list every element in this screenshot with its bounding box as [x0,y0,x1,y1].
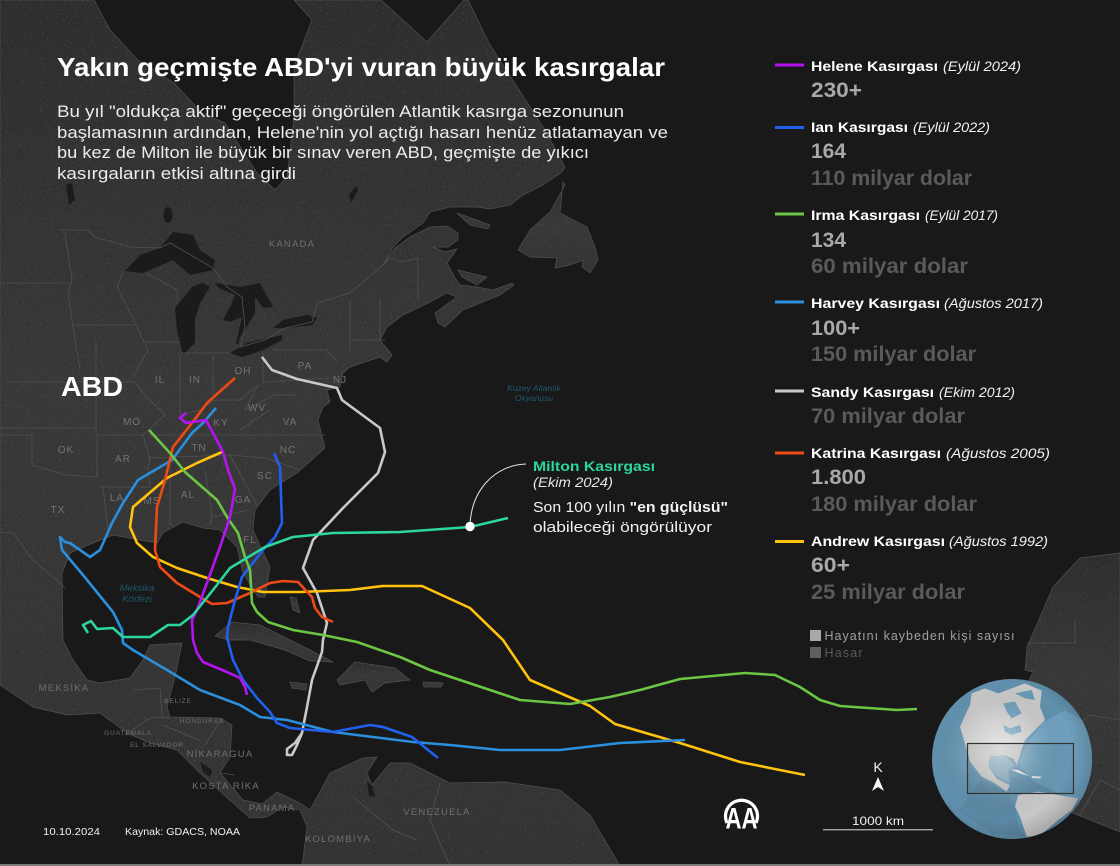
legend item: Katrina: Katrina Kasırgası [811,445,941,461]
legend item: Katrina: 180 milyar dolar [811,493,977,516]
hurricane track: Helene [180,413,247,695]
map labels: AL [181,490,195,501]
legend item: Andrew: Andrew Kasırgası [811,533,945,549]
north arrow: K [873,759,883,775]
legend item: Irma: 60 milyar dolar [811,255,968,278]
map labels: MS [144,496,160,507]
scale bar [823,814,933,830]
map labels: GA [235,495,251,506]
map labels: GUATEMALA [104,730,152,737]
label: North Atlantic Ocean: Kuzey Atlantik [507,383,562,393]
hurricane track: Andrew [130,452,805,775]
map labels: AR [115,454,131,465]
hurricane track: Harvey [60,408,685,750]
map labels: KY [213,418,229,429]
map labels: MEKSİKA [39,683,89,694]
legend: hurricanes [775,58,1050,604]
legend item: Irma: (Eylül 2017) [925,208,998,223]
map labels: EL SALVADOR [130,742,184,749]
map labels: IN [189,375,201,386]
label: North Atlantic Ocean: Okyanusu [515,393,553,403]
legend key: deaths and damage: Hasar [824,646,862,660]
map labels: KOSTA RİKA [192,781,260,792]
label: ABD: ABD [61,371,123,402]
label: Gulf of Mexico: Meksika [120,583,154,594]
hurricane track: Milton [83,518,508,637]
map labels: MO [123,417,141,428]
callout: Milton text: olabileceği öngörülüyor [533,520,712,536]
logo: Anadolu Agency: AA [726,802,758,836]
callout: Milton text: (Ekim 2024) [533,475,613,490]
legend item: Irma: Irma Kasırgası [811,207,920,223]
legend item: Sandy: (Ekim 2012) [939,385,1015,400]
legend item: Andrew: 60+ [811,554,850,577]
title: Yakın geçmişte ABD'yi vuran büyük kasırgalar [57,52,665,82]
hurricane track: Irma [149,430,917,710]
map labels: NC [280,445,296,456]
map labels: WV [248,403,266,414]
intro text [57,102,668,183]
intro text: kasırgaların etkisi altına girdi [57,164,296,183]
map labels: TN [191,443,207,454]
map labels: BELIZE [164,698,192,705]
legend item: Harvey: 100+ [811,317,860,340]
legend item: Andrew [775,533,1048,604]
legend key: deaths and damage [810,629,1014,660]
callout: Milton text: Milton Kasırgası [533,458,655,474]
callout: Milton text [533,458,728,536]
footer: date: 10.10.2024 [43,826,100,838]
hurricane track: Sandy [262,357,385,755]
legend item: Ian: (Eylül 2022) [913,120,990,135]
label: North Atlantic Ocean [507,383,562,403]
map labels: LA [110,493,124,504]
intro text: bu kez de Milton ile büyük bir sınav veren ABD, geçmişte de yıkıcı [57,143,589,162]
legend item: Katrina [775,445,1050,516]
map labels: OH [234,366,252,377]
map labels: VA [283,417,297,428]
legend item: Sandy: 70 milyar dolar [811,405,965,428]
legend item: Harvey: Harvey Kasırgası [811,295,940,311]
map labels: KOLOMBİYA [305,834,371,845]
legend item: Andrew: 25 milyar dolar [811,581,965,604]
legend item: Helene: 230+ [811,79,862,102]
map labels [39,239,471,845]
legend item: Sandy [775,384,1015,428]
legend item: Helene: (Eylül 2024) [943,59,1021,74]
map labels: IL [155,375,165,386]
map labels: VENEZUELA [403,807,471,818]
legend item: Katrina: 1.800 [811,466,866,489]
inset globe [932,679,1098,839]
intro text: başlamasının ardından, Helene'nin yol açtığı hasarı henüz atlatamayan ve [57,123,668,142]
legend item: Harvey [775,295,1043,366]
footer: source: Kaynak: GDACS, NOAA [125,826,240,838]
legend item: Irma: 134 [811,229,846,252]
map labels: SC [257,471,273,482]
map labels: TX [51,505,65,516]
map labels: NİKARAGUA [187,749,253,760]
legend item: Katrina: (Ağustos 2005) [946,446,1050,461]
map labels: OK [58,445,74,456]
legend key: deaths and damage: Hayatını kaybeden kişi sayısı [824,629,1014,643]
label: Gulf of Mexico [120,583,154,605]
map labels: FL [243,535,257,546]
north arrow [872,759,884,791]
legend item: Andrew: (Ağustos 1992) [949,534,1048,549]
hurricane track: Ian [227,453,438,758]
map labels: PA [298,361,312,372]
map labels: HONDURAS [180,718,224,725]
legend item: Harvey: 150 milyar dolar [811,343,976,366]
scale bar: 1000 km [852,814,904,828]
label: Gulf of Mexico: Körfezi [122,594,153,605]
legend item: Ian: 110 milyar dolar [811,167,972,190]
map labels: KANADA [269,239,315,250]
legend item: Helene [775,58,1021,102]
legend item: Sandy: Sandy Kasırgası [811,384,934,400]
map labels: PANAMA [249,803,295,814]
legend item: Helene: Helene Kasırgası [811,58,938,74]
legend item: Irma [775,207,998,278]
legend item: Ian: Ian Kasırgası [811,119,908,135]
intro text: Bu yıl "oldukça aktif" geçeceği öngörülen Atlantik kasırga sezonunun [57,102,624,121]
map labels: NJ [333,375,347,386]
hurricane track: Katrina [155,378,333,622]
legend item: Harvey: (Ağustos 2017) [944,296,1043,311]
callout: Milton text: Son 100 yılın "en güçlüsü" [533,500,728,516]
callout: Milton leader and marker [465,464,526,531]
legend item: Ian: 164 [811,140,846,163]
legend item: Ian [775,119,990,190]
